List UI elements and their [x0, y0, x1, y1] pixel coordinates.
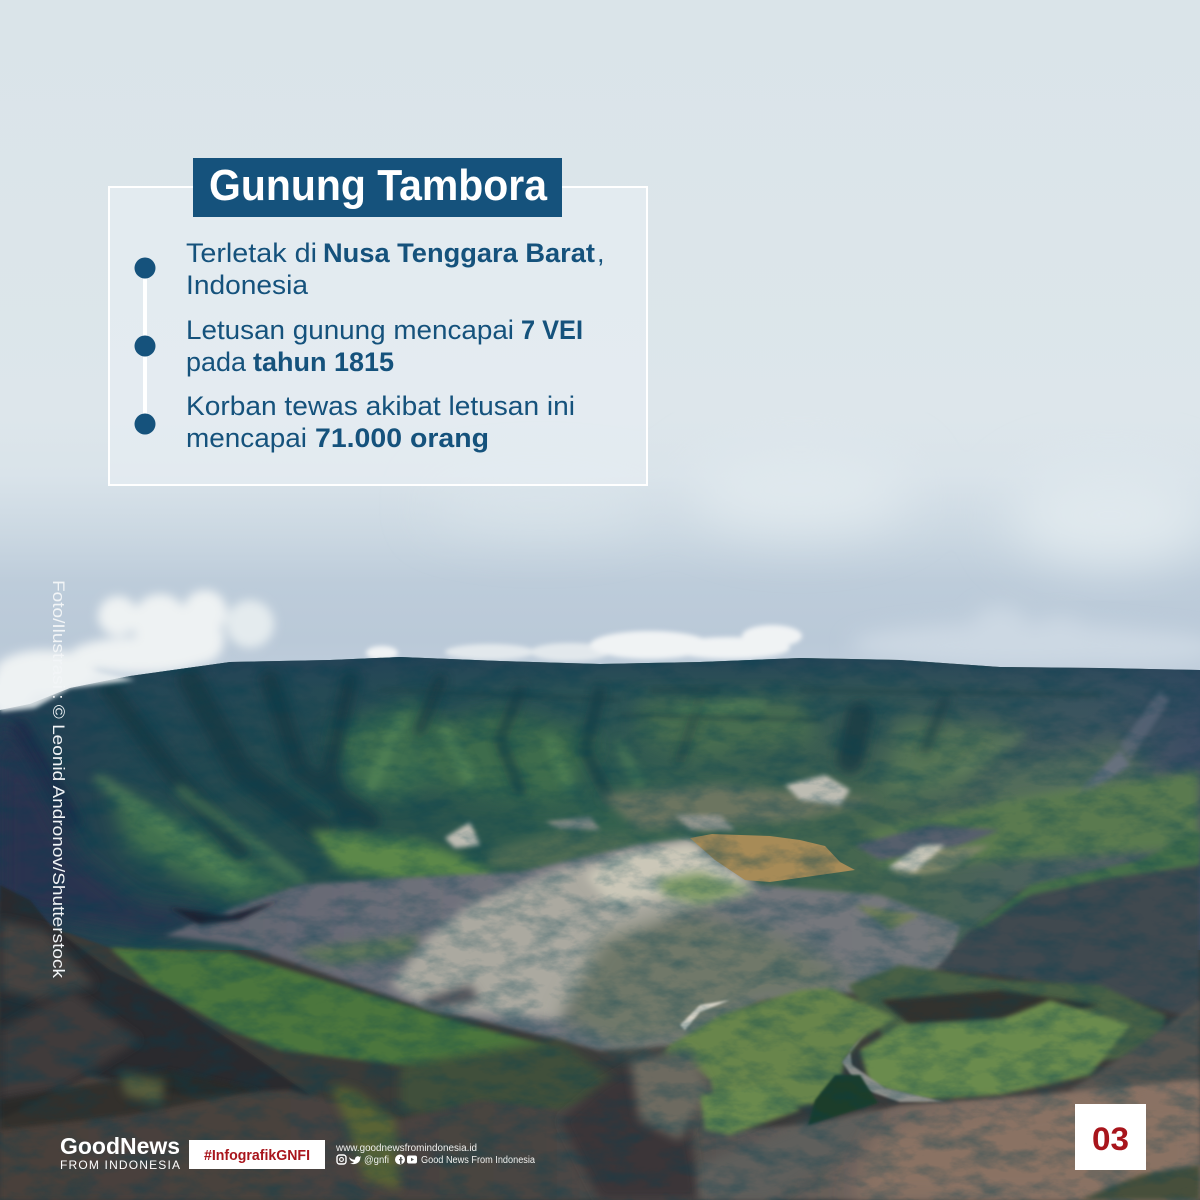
right slope — [935, 830, 1200, 1020]
icon: facebook — [395, 1154, 405, 1164]
green hills, left — [52, 926, 608, 1114]
green hills, right — [662, 963, 1200, 1109]
fact: eruption scale — [186, 315, 583, 377]
website and social links — [335, 1142, 535, 1166]
cloud wisp over left ridge — [0, 665, 135, 712]
page number badge: 03 — [1092, 1121, 1129, 1157]
white clouds — [0, 590, 274, 711]
panel background — [109, 187, 647, 485]
fact: eruption scale: Letusan gunung mencapai — [186, 315, 514, 345]
hashtag badge: #InfografikGNFI — [204, 1148, 310, 1164]
wall gullies — [20, 680, 945, 850]
fact: death toll: 71.000 orang — [315, 423, 489, 453]
foreground rocks — [0, 885, 1200, 1200]
heading: Gunung Tambora — [209, 161, 547, 210]
panel: Gunung Tambora facts — [109, 158, 647, 485]
ash plain — [165, 825, 1000, 1050]
photo credit: Foto/Ilustrasi : © Leonid Andronov/Shutterstock — [49, 580, 68, 979]
icon: instagram — [337, 1155, 346, 1164]
crater lake — [690, 834, 855, 882]
icon: twitter — [349, 1156, 361, 1164]
logo: GoodNews from Indonesia: GoodNews — [60, 1133, 180, 1159]
website and social links: Good News From Indonesia — [421, 1155, 535, 1166]
crater floor vegetation and rocks — [310, 770, 1200, 880]
fact: eruption scale: pada — [186, 347, 247, 377]
land base — [0, 950, 1200, 1200]
fact: eruption scale: 7 VEI — [521, 315, 583, 345]
fact: death toll: Korban tewas akibat letusan ini — [186, 391, 575, 421]
crater wall — [0, 650, 1200, 950]
background photo: Tambora caldera — [0, 505, 1200, 1200]
fact: location: Terletak di — [186, 238, 317, 268]
icon: youtube — [407, 1156, 417, 1164]
sky with clouds — [0, 0, 1200, 720]
hashtag badge — [189, 1140, 325, 1169]
page number badge — [1075, 1104, 1146, 1170]
fact: location: Nusa Tenggara Barat — [323, 238, 595, 268]
logo: GoodNews from Indonesia — [60, 1133, 180, 1172]
website and social links: www.goodnewsfromindonesia.id — [335, 1142, 477, 1154]
fact: location: , — [597, 238, 605, 268]
photo texture — [0, 650, 1200, 1200]
fact: death toll: mencapai — [186, 423, 307, 453]
fact: location — [186, 238, 605, 300]
logo: GoodNews from Indonesia: FROM INDONESIA — [60, 1158, 180, 1172]
timeline bullets — [134, 258, 156, 434]
fact: location: Indonesia — [186, 270, 309, 300]
website and social links: @gnfi — [364, 1155, 389, 1166]
fact: eruption scale: tahun 1815 — [253, 347, 394, 377]
fact: death toll — [186, 391, 575, 453]
